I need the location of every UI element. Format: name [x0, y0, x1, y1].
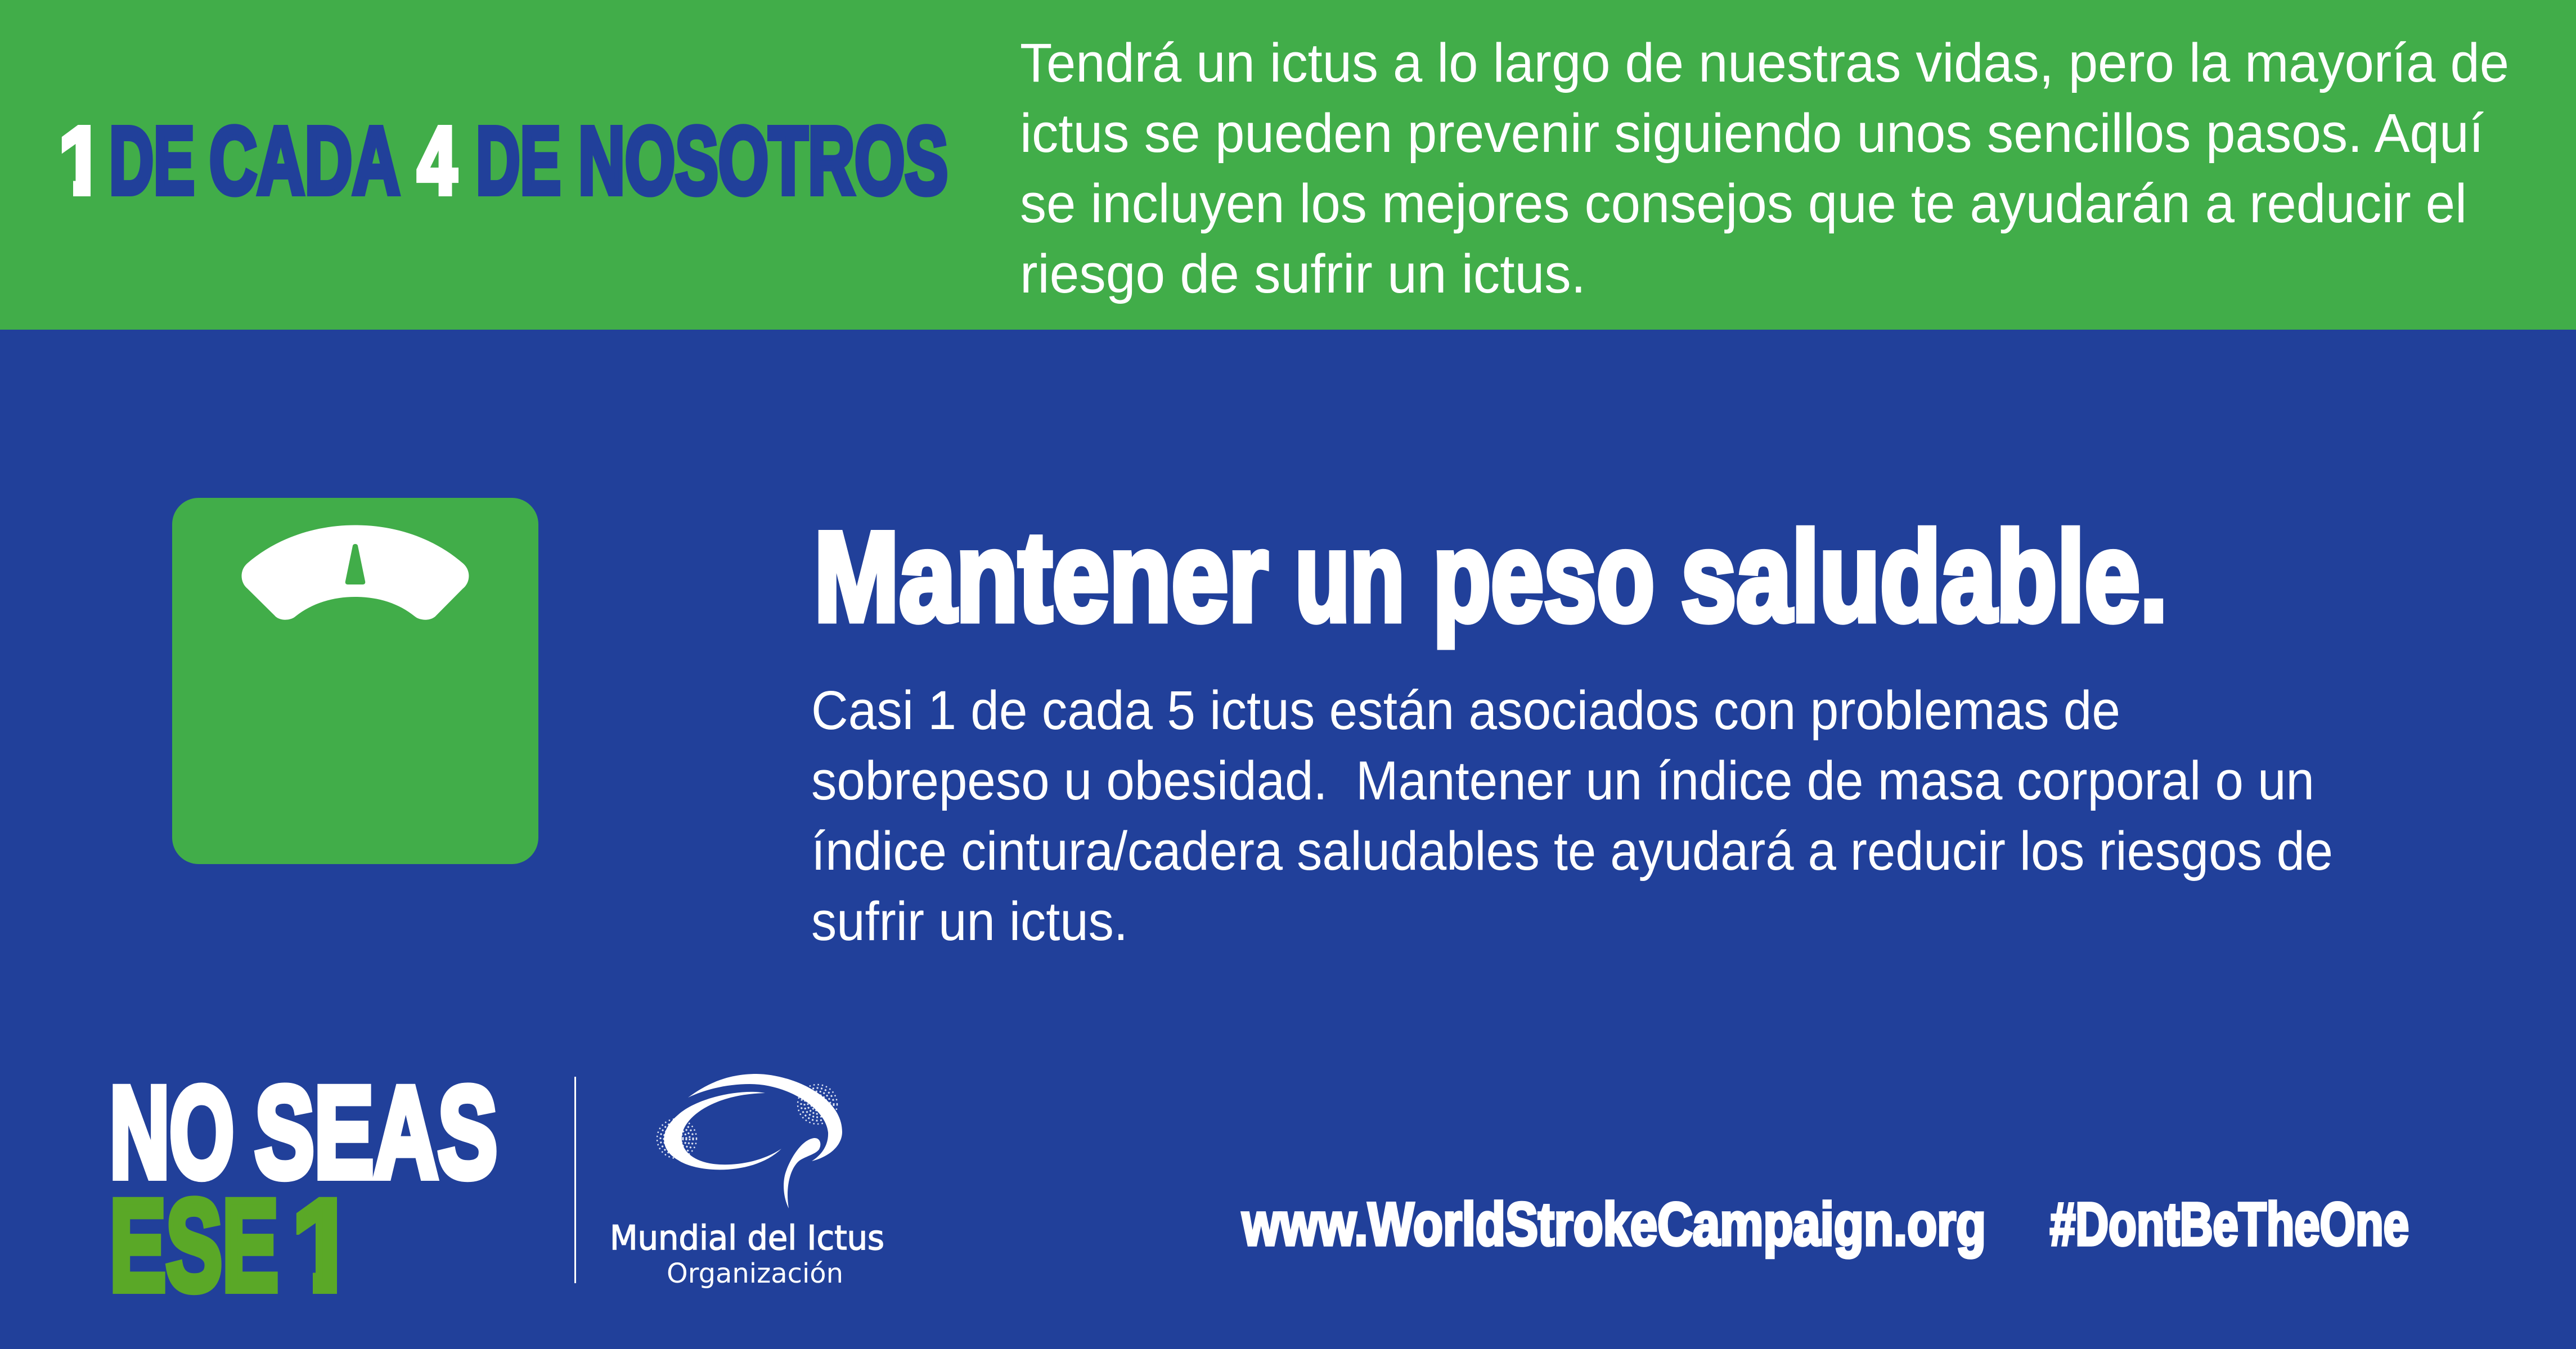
title: 1 de cada 4 de nosotros: CADA	[209, 107, 400, 214]
logo subtitle: Organización	[667, 1258, 843, 1289]
body text: índice cintura/cadera saludables te ayudará a reducir los riesgos de	[811, 820, 2333, 882]
panel: green header band	[0, 0, 2576, 330]
intro text	[1020, 32, 2509, 304]
title: 1 de cada 4 de nosotros: NOSOTROS	[578, 107, 948, 214]
campaign slogan: SEAS	[255, 1060, 497, 1204]
logo name: Mundial del Ictus	[610, 1218, 884, 1258]
logo: World Stroke Organization	[610, 1074, 884, 1289]
intro text: ictus se pueden prevenir siguiendo unos sencillos pasos. Aquí	[1020, 102, 2484, 164]
campaign slogan: 1	[292, 1173, 357, 1317]
heading: Mantener	[814, 505, 1268, 647]
campaign slogan: ESE	[110, 1173, 278, 1317]
heading: un	[1295, 505, 1405, 647]
heading	[814, 505, 2168, 647]
logo halftone dots	[657, 1085, 837, 1158]
title: 1 de cada 4 de nosotros	[62, 124, 947, 197]
body text	[811, 680, 2333, 952]
title: 1 de cada 4 de nosotros: 4	[417, 107, 457, 214]
scale needle	[345, 544, 365, 584]
intro text: Tendrá un ictus a lo largo de nuestras vidas, pero la mayoría de	[1020, 32, 2509, 93]
heading: peso	[1433, 505, 1655, 647]
scale dial	[241, 525, 469, 620]
title: 1 de cada 4 de nosotros: 1	[59, 107, 105, 214]
hashtag: #DontBeTheOne	[2050, 1190, 2409, 1258]
logo outer arc	[688, 1074, 842, 1161]
campaign slogan: NO	[110, 1060, 234, 1204]
website url: www.WorldStrokeCampaign.org	[1242, 1190, 1986, 1258]
body text: sufrir un ictus.	[811, 891, 1128, 952]
body text: Casi 1 de cada 5 ictus están asociados con problemas de	[811, 680, 2120, 741]
logo inner arc	[664, 1092, 781, 1170]
title: 1 de cada 4 de nosotros: DE	[109, 107, 195, 214]
logo brain stem	[784, 1138, 820, 1208]
campaign slogan	[113, 1082, 497, 1295]
heading: saludable.	[1681, 505, 2168, 647]
icon: bathroom scale	[172, 498, 538, 864]
intro text: se incluyen los mejores consejos que te ayudarán a reducir el	[1020, 173, 2467, 234]
body text: sobrepeso u obesidad. Mantener un índice de masa corporal o un	[811, 750, 2314, 811]
title: 1 de cada 4 de nosotros: DE	[476, 107, 561, 214]
intro text: riesgo de sufrir un ictus.	[1020, 243, 1586, 304]
